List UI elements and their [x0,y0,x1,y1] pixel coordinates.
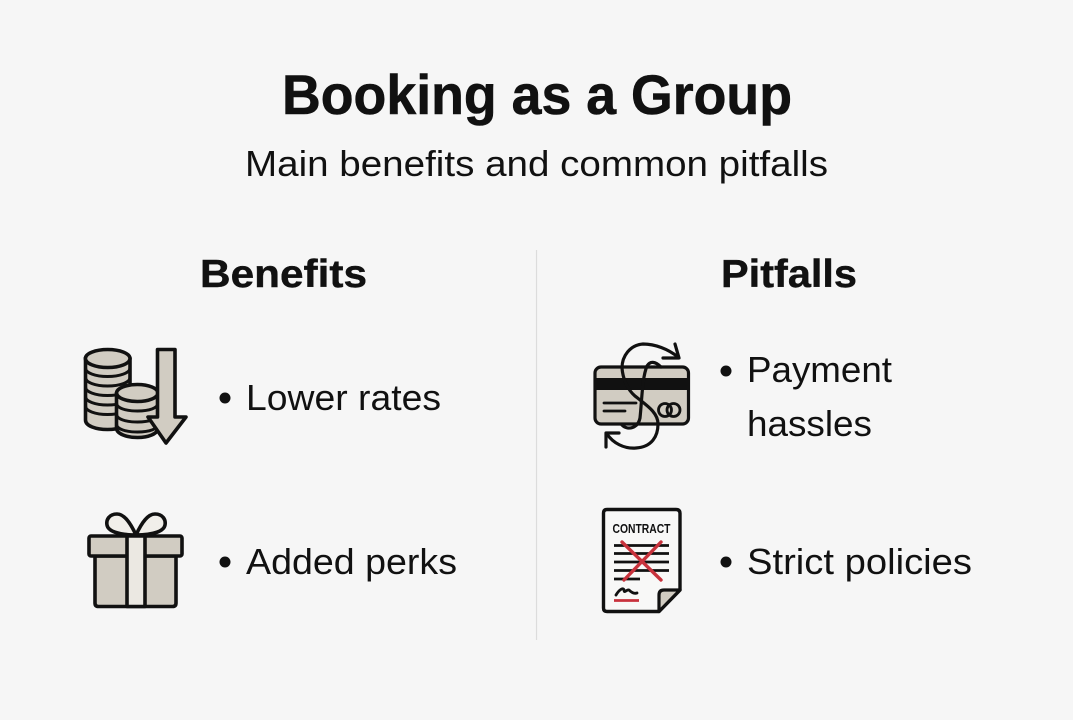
panel: benefits [85,253,457,606]
heading: pitfalls: Pitfalls [721,253,857,296]
title: Booking as a Group [282,63,792,126]
icon: gift box [89,514,182,606]
heading: benefits: Benefits [200,253,367,296]
icon: crossed-out contract [604,510,680,612]
panel: pitfalls [595,253,972,612]
bullet: payment hassles [720,349,892,444]
bullet: payment hassles: hassles [747,403,872,444]
icon: crossed-out contract: CONTRACT [612,521,671,536]
bullet: lower rates: Lower rates [246,377,441,418]
subtitle: Main benefits and common pitfalls [245,143,828,184]
icon: credit card with circular arrows [595,344,688,448]
bullet: payment hassles: Payment [747,349,892,390]
icon: coin stacks with down arrow [85,350,186,443]
bullet: strict policies: Strict policies [747,541,972,582]
bullet: added perks: Added perks [246,541,457,582]
